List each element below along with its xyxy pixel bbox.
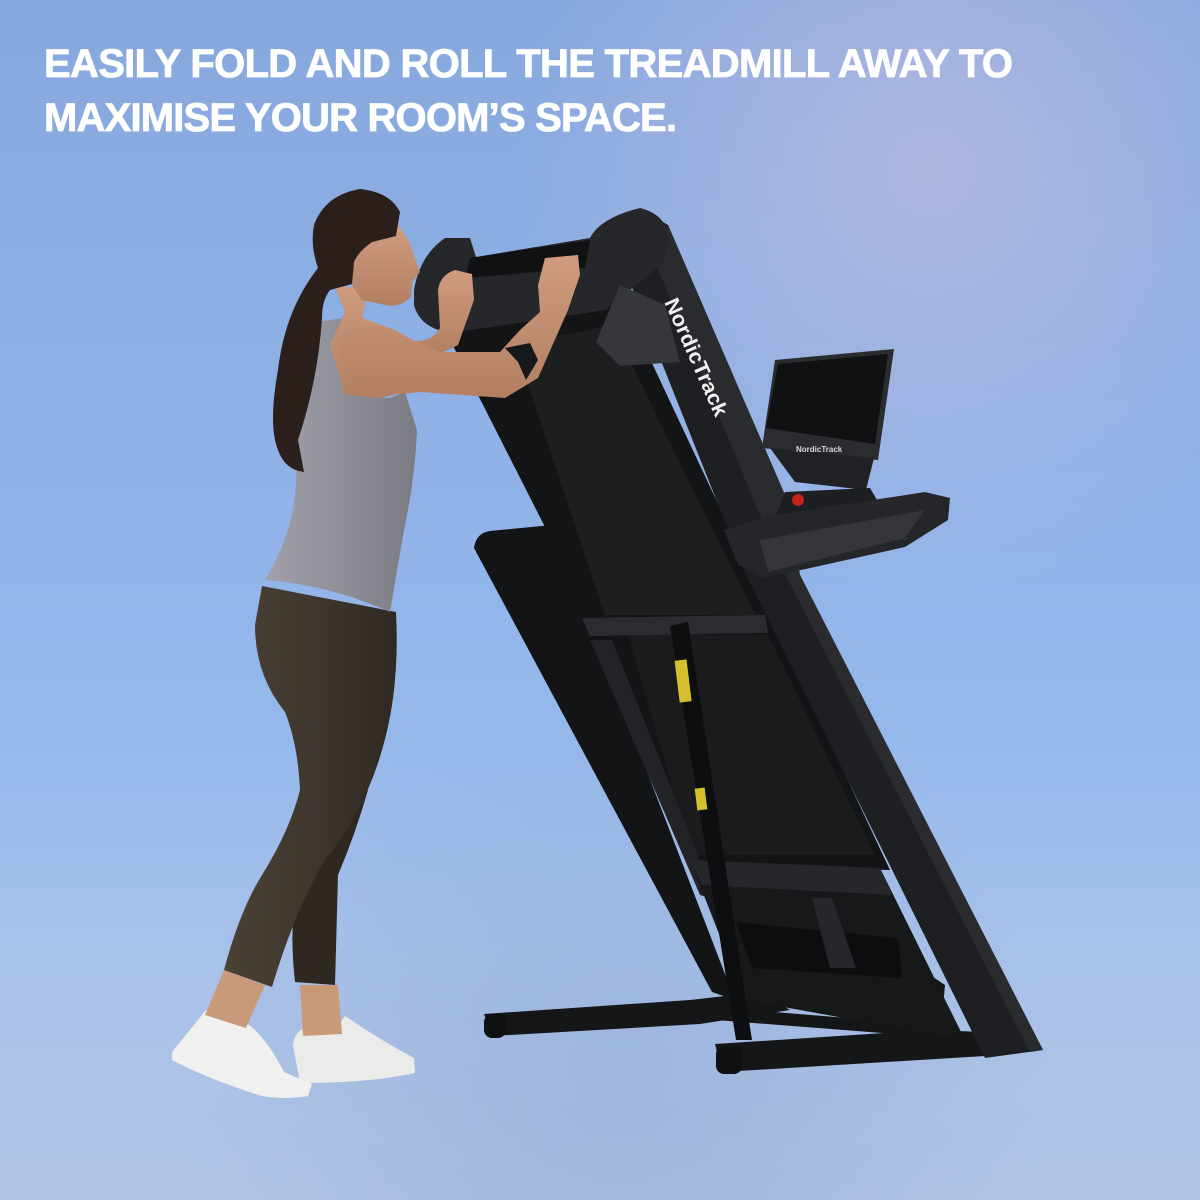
head [345,225,420,306]
motor cover and vent [690,860,965,1040]
lower deck panel [474,525,735,1000]
far arm [405,270,474,356]
title: EASILY FOLD AND ROLL THE TREADMILL AWAY TO [44,42,1013,86]
title [44,42,1013,140]
console tray [724,488,950,578]
brand label on rail: NordicTrack [659,295,732,420]
upper belt [515,325,755,615]
ankles [205,970,342,1036]
title: MAXIMISE YOUR ROOM’S SPACE. [44,96,677,140]
woman [172,189,580,1098]
near arm [341,255,580,398]
treadmill [414,208,1043,1074]
monitor: NordicTrack [796,445,843,454]
right side rail [625,208,1043,1058]
upper deck body [445,295,890,870]
far leg [292,790,368,985]
wrist band [505,343,538,380]
leggings [224,586,397,987]
base frame and feet [484,975,985,1074]
cross bar [582,615,768,636]
right shoe [172,1010,312,1098]
left shoe [293,1016,415,1083]
lower belt [628,635,875,855]
monitor [762,349,894,490]
neck and shoulders [330,285,408,398]
tank top [265,318,417,612]
handlebar top [414,208,680,366]
folding strut with yellow labels [670,622,752,1040]
side strut highlight [590,640,716,900]
hair and ponytail [273,189,400,472]
